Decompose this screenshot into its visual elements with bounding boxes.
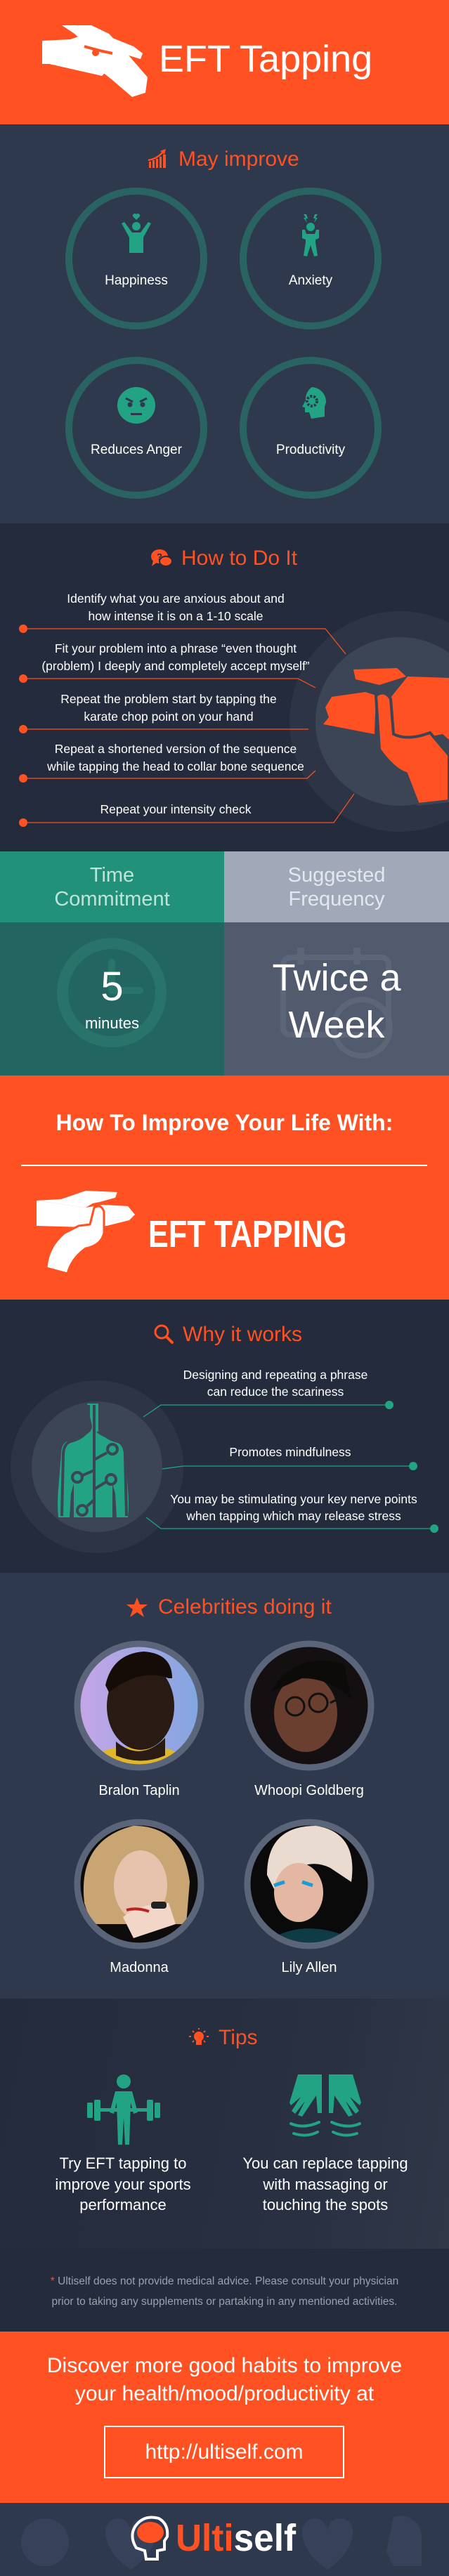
- icon: clock: [57, 938, 167, 1047]
- title: eft tapping: EFT TAPPING: [148, 1213, 346, 1255]
- disclaimer: prior to taking any supplements or partaking in any mentioned activities.: [52, 2296, 397, 2308]
- tip 2 text: touching the spots: [263, 2196, 388, 2214]
- panel: may improve: [0, 124, 449, 523]
- icon: hands header: [42, 25, 148, 97]
- icon: chat question: [151, 549, 171, 566]
- icon: tapping hand: [37, 1191, 135, 1273]
- step 3: Repeat the problem start by tapping the: [60, 692, 277, 706]
- label: productivity: Productivity: [276, 443, 345, 457]
- logo: ultiself: Ultiself: [176, 2517, 296, 2559]
- icon: chat question: ?: [157, 551, 162, 562]
- value: 5 minutes: 5: [100, 964, 124, 1009]
- heading: how to improve your life with: How To Improve Your Life With:: [56, 1110, 393, 1135]
- label: anxiety: Anxiety: [289, 273, 332, 288]
- name: madonna: Madonna: [110, 1960, 169, 1975]
- suggested frequency header: Suggested: [288, 864, 385, 887]
- heading: celebrities doing it: Celebrities doing it: [158, 1595, 332, 1619]
- name: bralon taplin: Bralon Taplin: [98, 1783, 180, 1798]
- value: twice a week: [272, 957, 401, 1046]
- time body: [0, 922, 224, 1075]
- icon: growth chart: [148, 149, 166, 168]
- photo: bralon taplin: [80, 1647, 198, 1765]
- benefits circles: [65, 188, 382, 499]
- panel: how to do it: [0, 523, 449, 851]
- time commitment header: [0, 851, 224, 922]
- label: happiness: Happiness: [105, 273, 168, 288]
- panel: tips: [0, 1999, 449, 2249]
- photo: lily allen: [250, 1825, 368, 1943]
- icon: bulb: [189, 2028, 209, 2045]
- name: whoopi goldberg: Whoopi Goldberg: [254, 1783, 364, 1798]
- step 2: Fit your problem into a phrase “even thought: [55, 641, 297, 655]
- time commitment header: Time: [90, 864, 134, 887]
- logo: ultiself: [131, 2516, 297, 2561]
- tip 1 text: Try EFT tapping to: [60, 2155, 186, 2172]
- title: EFT Tapping: [159, 38, 372, 80]
- step 4: [47, 742, 304, 773]
- icon: happiness: [122, 214, 151, 253]
- icon: magnifier: [155, 1325, 174, 1345]
- reason 3: You may be stimulating your key nerve points: [170, 1492, 417, 1506]
- step 4: Repeat a shortened version of the sequence: [55, 742, 297, 756]
- suggested frequency header: Frequency: [288, 888, 385, 910]
- illustration: hand circle: [19, 611, 449, 832]
- photo: whoopi goldberg: [250, 1647, 368, 1765]
- panel: celebrities: [74, 1597, 374, 1975]
- step 4: while tapping the head to collar bone sequence: [47, 759, 304, 773]
- cta text: your health/mood/productivity at: [75, 2382, 374, 2405]
- name: lily allen: Lily Allen: [282, 1960, 337, 1975]
- icon: weightlifter: [87, 2074, 160, 2145]
- reason 1: Designing and repeating a phrase: [183, 1368, 367, 1382]
- reason 1: [183, 1368, 367, 1399]
- heading: tips: [189, 2026, 258, 2049]
- icon: massaging hands: [289, 2074, 361, 2137]
- icon: brain head: [131, 2516, 169, 2561]
- time commitment header: Commitment: [54, 888, 170, 910]
- heading: tips: Tips: [219, 2026, 258, 2049]
- value: twice a week: Week: [288, 1004, 385, 1046]
- tip 2 text: with massaging or: [263, 2175, 388, 2193]
- header: [0, 0, 449, 124]
- icon: productivity head: [302, 387, 326, 419]
- illustration: body nerve points: [11, 1380, 438, 1553]
- tip 2 text: You can replace tapping: [242, 2155, 408, 2172]
- icon: calendar: [280, 948, 393, 1059]
- frequency body: [224, 922, 449, 1075]
- disclaimer: * Ultiself does not provide medical advice. Please consult your physician: [51, 2275, 398, 2287]
- cta text: Discover more good habits to improve: [47, 2354, 402, 2377]
- reason 2: Promotes mindfulness: [229, 1445, 351, 1459]
- disclaimer: [0, 2249, 449, 2332]
- heading: how to do it: How to Do It: [181, 547, 297, 570]
- cta text: [47, 2354, 402, 2405]
- step 2: [41, 641, 310, 673]
- time body: minutes: [85, 1014, 139, 1032]
- icon: angry face: [117, 387, 155, 424]
- tip 1 text: improve your sports: [55, 2175, 191, 2193]
- tip 1 text: [55, 2155, 191, 2214]
- step 3: karate chop point on your hand: [84, 710, 254, 724]
- heading: may improve: May improve: [178, 148, 299, 171]
- heading: why it works: Why it works: [183, 1323, 302, 1346]
- step 1: how intense it is on a 1-10 scale: [88, 609, 263, 623]
- step 3: [60, 692, 277, 724]
- step 5: Repeat your intensity check: [100, 802, 251, 816]
- reason 1: can reduce the scariness: [207, 1385, 344, 1399]
- icon: anxiety: [302, 214, 319, 256]
- panel: time and frequency: [0, 851, 449, 1075]
- step 2: (problem) I deeply and completely accept myself”: [41, 659, 310, 673]
- step 1: Identify what you are anxious about and: [67, 591, 285, 606]
- panel: why it works: [0, 1300, 449, 1573]
- url button: [104, 2426, 344, 2478]
- panel: call to action: [0, 2332, 449, 2503]
- footer: [0, 2503, 449, 2576]
- url button: http://ultiself.com: [145, 2440, 304, 2464]
- reason 3: when tapping which may release stress: [186, 1509, 401, 1523]
- step 1: [67, 591, 285, 623]
- value: twice a week: Twice a: [272, 957, 401, 999]
- suggested frequency header: [224, 851, 449, 922]
- tip 2 text: [242, 2155, 408, 2214]
- label: reduces anger: Reduces Anger: [91, 443, 182, 457]
- photo: madonna: [80, 1825, 198, 1943]
- reason 3: [170, 1492, 417, 1523]
- tip 1 text: performance: [79, 2196, 167, 2214]
- panel: improve your life banner: [0, 1075, 449, 1300]
- icon: star: [126, 1597, 148, 1617]
